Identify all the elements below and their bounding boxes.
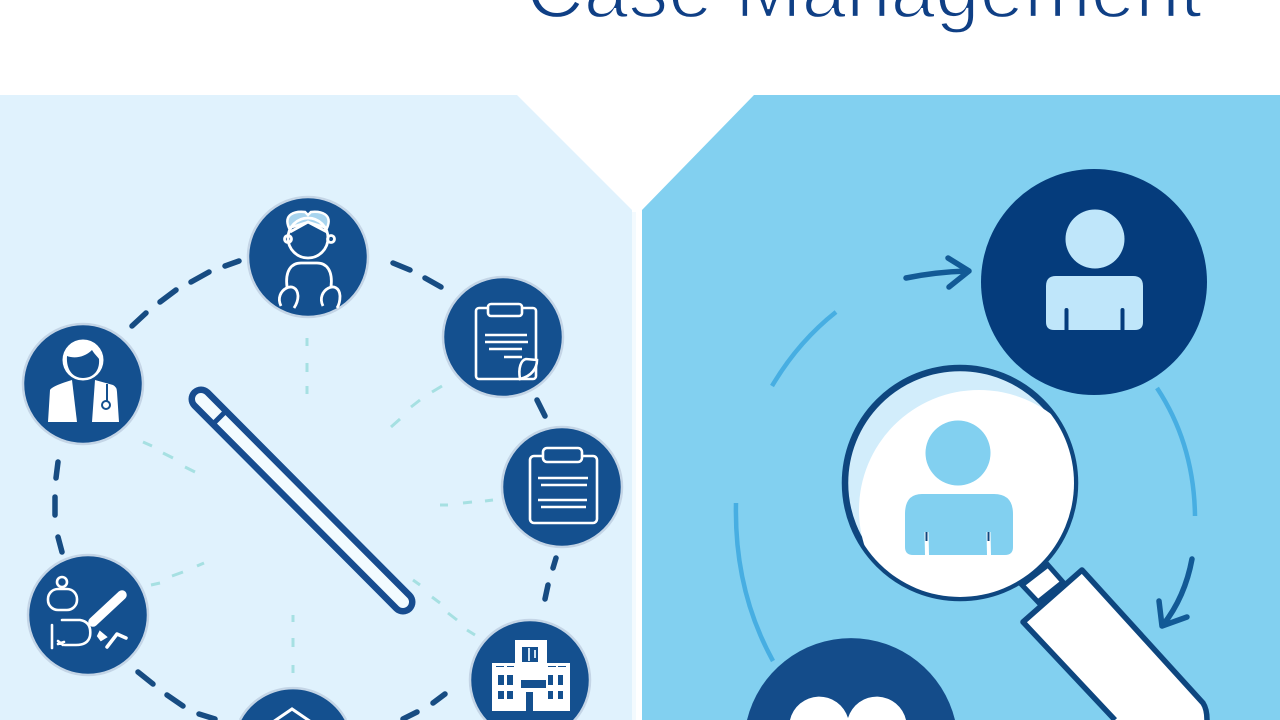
patient circle [981, 169, 1207, 395]
panel: patient focus [642, 95, 1280, 720]
node: surgeon [248, 197, 368, 317]
central pencil bar [201, 399, 403, 602]
node: hospital [470, 620, 590, 720]
node: patient notes and pen [28, 555, 148, 675]
arrow into patient circle [906, 258, 969, 287]
care circle with heart [747, 638, 955, 720]
magnified patient figure [905, 420, 1013, 555]
node: clinician [23, 324, 143, 444]
node: clipboard with pencil [443, 277, 563, 397]
magnifying glass [845, 368, 1207, 720]
light cycle arcs [736, 312, 1195, 661]
node: home care [240, 688, 346, 720]
dashed ring connecting nodes [55, 261, 556, 719]
panel: care team network [0, 95, 636, 720]
teal spokes [143, 338, 493, 673]
node: document clipboard [502, 427, 622, 547]
dark cycle arrow [1159, 559, 1192, 626]
